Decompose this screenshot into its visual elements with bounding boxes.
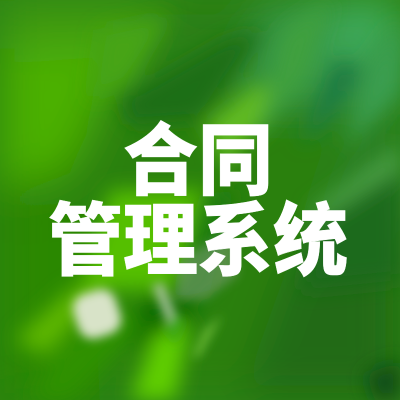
title line 2: 管理系统 [48, 197, 348, 285]
blurred droplet glints [175, 230, 238, 300]
title line 1: 合同 [123, 117, 273, 205]
title [48, 117, 348, 285]
